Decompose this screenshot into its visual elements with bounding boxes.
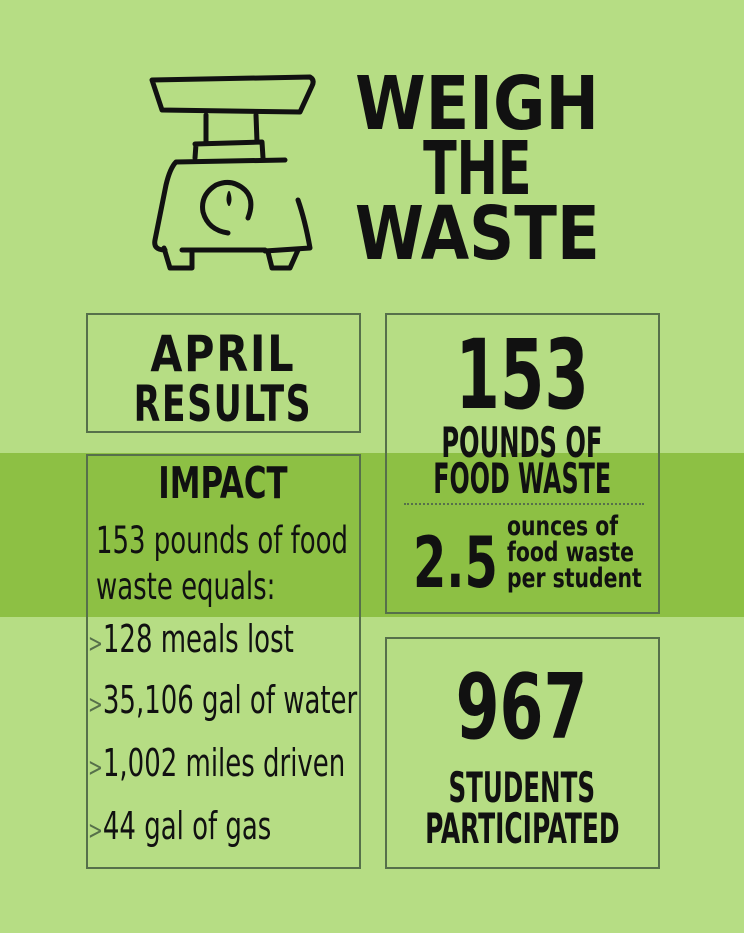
panel: april results: APRIL (150, 325, 296, 383)
list: impact equivalents: >128 meals lost (88, 617, 294, 661)
title: THE (423, 126, 531, 212)
icon: scale (150, 74, 316, 270)
panel: students participated (385, 637, 660, 869)
stat: 967: 967 (456, 655, 588, 760)
title: WASTE (355, 191, 599, 277)
list: impact equivalents (88, 617, 358, 848)
text: impact intro: waste equals: (96, 565, 275, 608)
panel: pounds of food waste (385, 313, 660, 614)
panel: april results (86, 313, 361, 433)
stat: 153: 153 (455, 319, 589, 431)
label: students participated: PARTICIPATED (425, 804, 619, 853)
panel: pounds of food waste: per student (507, 563, 642, 594)
title: WEIGH (355, 61, 599, 147)
label: pounds of food waste (433, 418, 611, 503)
list: impact equivalents: >1,002 miles driven (88, 741, 345, 785)
label: students participated: STUDENTS (449, 763, 595, 812)
panel: pounds of food waste: ounces of (507, 511, 618, 542)
label: pounds of food waste: POUNDS OF (441, 418, 603, 467)
list: impact equivalents: >44 gal of gas (88, 804, 271, 848)
label: pounds of food waste: FOOD WASTE (433, 454, 611, 503)
panel: impact (86, 454, 361, 869)
text: impact intro: 153 pounds of food (96, 519, 348, 562)
text: impact intro (96, 519, 348, 608)
title (355, 61, 599, 277)
list: impact equivalents: >35,106 gal of water (88, 678, 357, 722)
panel: pounds of food waste: food waste (507, 537, 634, 568)
stat: 2.5 per student: 2.5 (413, 522, 498, 604)
heading: impact: IMPACT (158, 458, 288, 509)
panel: april results: RESULTS (134, 375, 312, 433)
label: students participated (425, 763, 619, 853)
